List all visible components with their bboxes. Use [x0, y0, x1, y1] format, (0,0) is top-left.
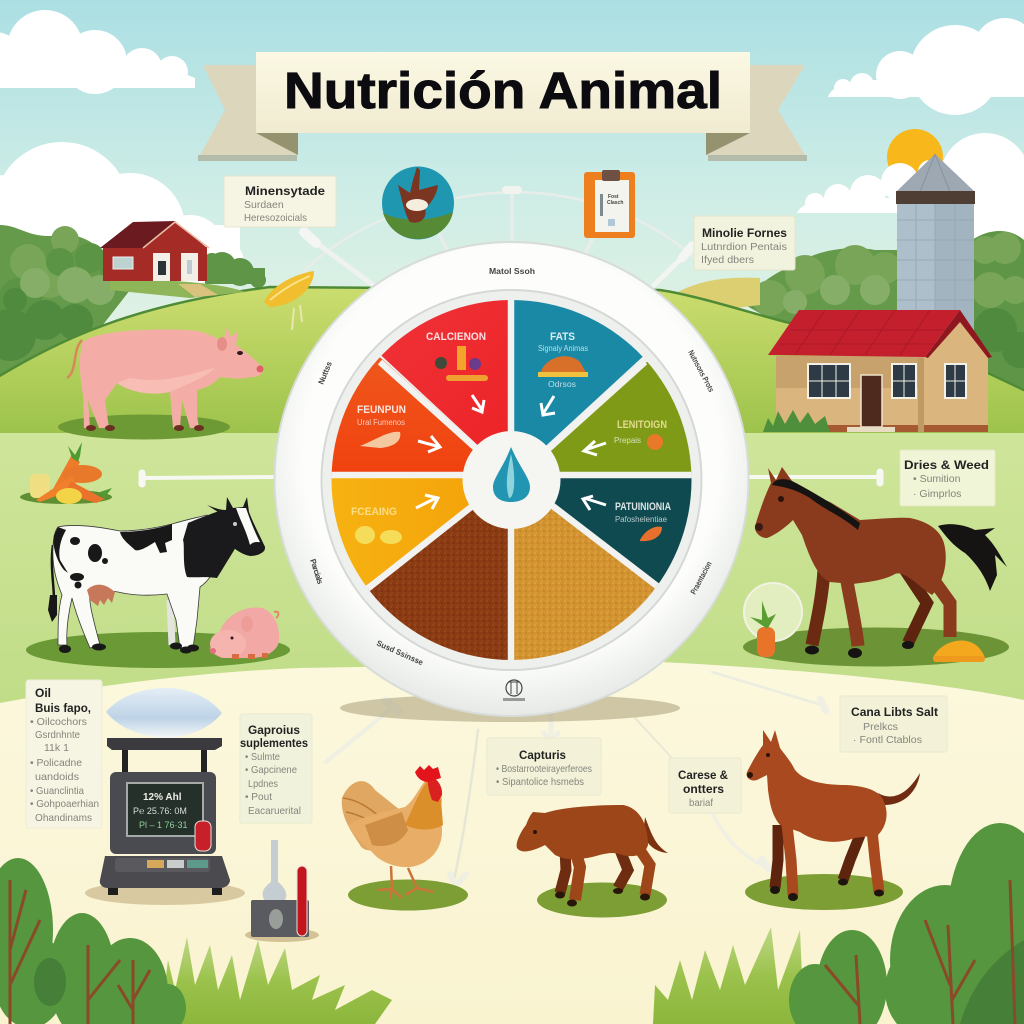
- callout: salt: Prelkcs: [863, 721, 898, 733]
- callout: minensytade: Heresozoicials: [244, 212, 307, 224]
- segment: patulonia: [583, 496, 671, 541]
- callout: oil: 11k 1: [44, 742, 69, 754]
- callout: oil: • Policadne: [30, 757, 82, 769]
- banner title: [198, 52, 807, 161]
- callout: suplementos: Lpdnes: [248, 778, 278, 790]
- tree line right: [665, 231, 1024, 392]
- segment: fats: FATS: [550, 331, 575, 343]
- segment: energy: FCEAING: [351, 506, 397, 518]
- segment: fats: Signaly Animas: [538, 344, 588, 353]
- callout: dries and weed: • Sumition: [913, 473, 961, 485]
- pig: [58, 327, 264, 440]
- orb with carrot icon: [744, 583, 802, 657]
- ring labels: Parcials: [308, 558, 325, 586]
- callout: oil: [26, 680, 102, 828]
- barn: [100, 221, 245, 298]
- segment: fats: Odrsos: [548, 380, 576, 389]
- nutrition wheel: [274, 242, 748, 722]
- callout: suplementos: • Gapcinene: [245, 764, 297, 776]
- callout: minensytade: [224, 176, 336, 227]
- scale dome: [106, 688, 222, 738]
- carrots icon: [20, 442, 112, 504]
- segment: calcium: [426, 331, 488, 412]
- callout: minolie fornes: Minolie Fornes: [702, 226, 787, 240]
- weighing scale: [85, 688, 245, 905]
- foreground grass left: [160, 937, 392, 1024]
- segment: protein: [357, 404, 440, 452]
- callout: minensytade: Minensytade: [245, 184, 325, 198]
- callout: salt: · Fontl Ctablos: [853, 734, 922, 746]
- callout: minolie fornes: Ifyed dbers: [701, 254, 754, 266]
- wheel ground shadow: [340, 694, 680, 722]
- segment: calcium: CALCIENON: [426, 331, 486, 343]
- wheel segments: [332, 300, 692, 660]
- callout: suplementos: Gaproius: [248, 723, 300, 737]
- callout: dries and weed: [900, 450, 995, 506]
- ring labels: Susd Ssinsse: [375, 639, 425, 667]
- sky background: [0, 0, 1024, 440]
- chicken badge: [382, 166, 454, 240]
- callout: suplementos: • Pout: [245, 791, 272, 803]
- cream foreground: [0, 662, 1024, 1024]
- weighing scale: 12% Ahl: [143, 792, 182, 803]
- callout: suplementos: Eacaruerital: [248, 805, 301, 817]
- silo: [896, 154, 975, 330]
- callout: carese: ontters: [683, 782, 724, 796]
- sun: [887, 129, 943, 185]
- ring labels: Praentacion: [689, 560, 714, 596]
- callout: minolie fornes: [694, 216, 795, 270]
- callout: oil: Oil: [35, 686, 51, 700]
- ring small logo: [503, 680, 525, 701]
- wheel outer ring: [274, 242, 748, 716]
- callout: dries and weed: · Gimprlos: [913, 488, 961, 500]
- weighing scale: P℮ 25.76: 0M: [133, 806, 187, 816]
- segment: patulonia: Pafoshelentiae: [615, 515, 668, 524]
- callout: suplementos: [240, 714, 312, 823]
- callout: oil: Buis fapo,: [35, 701, 91, 715]
- callout: oil: • Oilcochors: [30, 716, 87, 728]
- ring labels: [308, 267, 716, 667]
- flask and test tube: [245, 840, 319, 942]
- segment: energy: [351, 495, 438, 544]
- callout: salt: Cana Libts Salt: [851, 705, 938, 719]
- callout: oil: • Guanclintia: [30, 785, 84, 797]
- callout: capturis: • Sipantolice hsmebs: [496, 776, 584, 788]
- mid meadow: [0, 433, 1024, 733]
- segment: lentils: Prepais: [614, 436, 641, 445]
- title: Nutrición Animal: [284, 62, 722, 119]
- clipboard icon: [584, 170, 635, 238]
- rooster: [342, 765, 468, 910]
- callout: capturis: • Bostarrooteirayerferoes: [496, 763, 592, 775]
- clouds: [0, 10, 1024, 285]
- green hill: [0, 287, 1024, 440]
- callout: dries and weed: Dries & Weed: [904, 458, 989, 472]
- segment: protein: Ural Fumenos: [357, 418, 405, 427]
- callout: oil: uandoids: [35, 771, 79, 783]
- foreground trees left: [0, 858, 186, 1024]
- farmhouse: [763, 310, 992, 432]
- orange slice icon: [933, 641, 985, 662]
- segment: patulonia: PATUINIONIA: [615, 501, 671, 513]
- segment: lentils: [584, 419, 667, 455]
- lemon slice icon: [264, 271, 314, 330]
- foreground grass right: [653, 927, 804, 1024]
- clipboard icon: Fost: [608, 194, 619, 200]
- callout: oil: Ohandinams: [35, 812, 92, 824]
- foreground trees right: [789, 823, 1024, 1024]
- brown animal: [517, 805, 668, 918]
- callout: salt: [840, 696, 947, 752]
- callout: oil: Gsrdnhnte: [35, 729, 80, 741]
- callout: oil: • Gohpoaerhian: [30, 798, 99, 810]
- callout: minolie fornes: Lutnrdion Pentais: [701, 241, 787, 253]
- callout: capturis: [487, 738, 601, 795]
- callout: minensytade: Surdaen: [244, 199, 284, 211]
- dark horse: [743, 467, 1009, 666]
- callout: carese: Carese &: [678, 768, 728, 782]
- callout: carese: bariaf: [689, 797, 713, 809]
- water drop icon: [493, 447, 530, 502]
- tree line left: [0, 225, 266, 380]
- ring labels: Matol Ssoh: [489, 267, 535, 276]
- weighing scale: Pl – 1 76·31: [139, 820, 188, 830]
- cow: [26, 497, 290, 668]
- ring labels: Nutnsons Prots: [686, 349, 716, 394]
- small piglet: [210, 607, 279, 659]
- callout: suplementos: suplementes: [240, 736, 308, 750]
- segment: protein: FEUNPUN: [357, 404, 406, 416]
- ring labels: Nuttss: [317, 360, 334, 386]
- segment: fats: [538, 331, 588, 415]
- callout: carese: [669, 758, 741, 813]
- connector arc and bone pointers: [142, 190, 880, 886]
- segment: lentils: LENITOIGN: [617, 419, 667, 431]
- wheel hub: [462, 431, 560, 529]
- callout: suplementos: • Sulmte: [245, 751, 280, 763]
- brown horse: [745, 730, 920, 910]
- clipboard icon: Clasch: [607, 200, 623, 206]
- callout: capturis: Capturis: [519, 748, 566, 762]
